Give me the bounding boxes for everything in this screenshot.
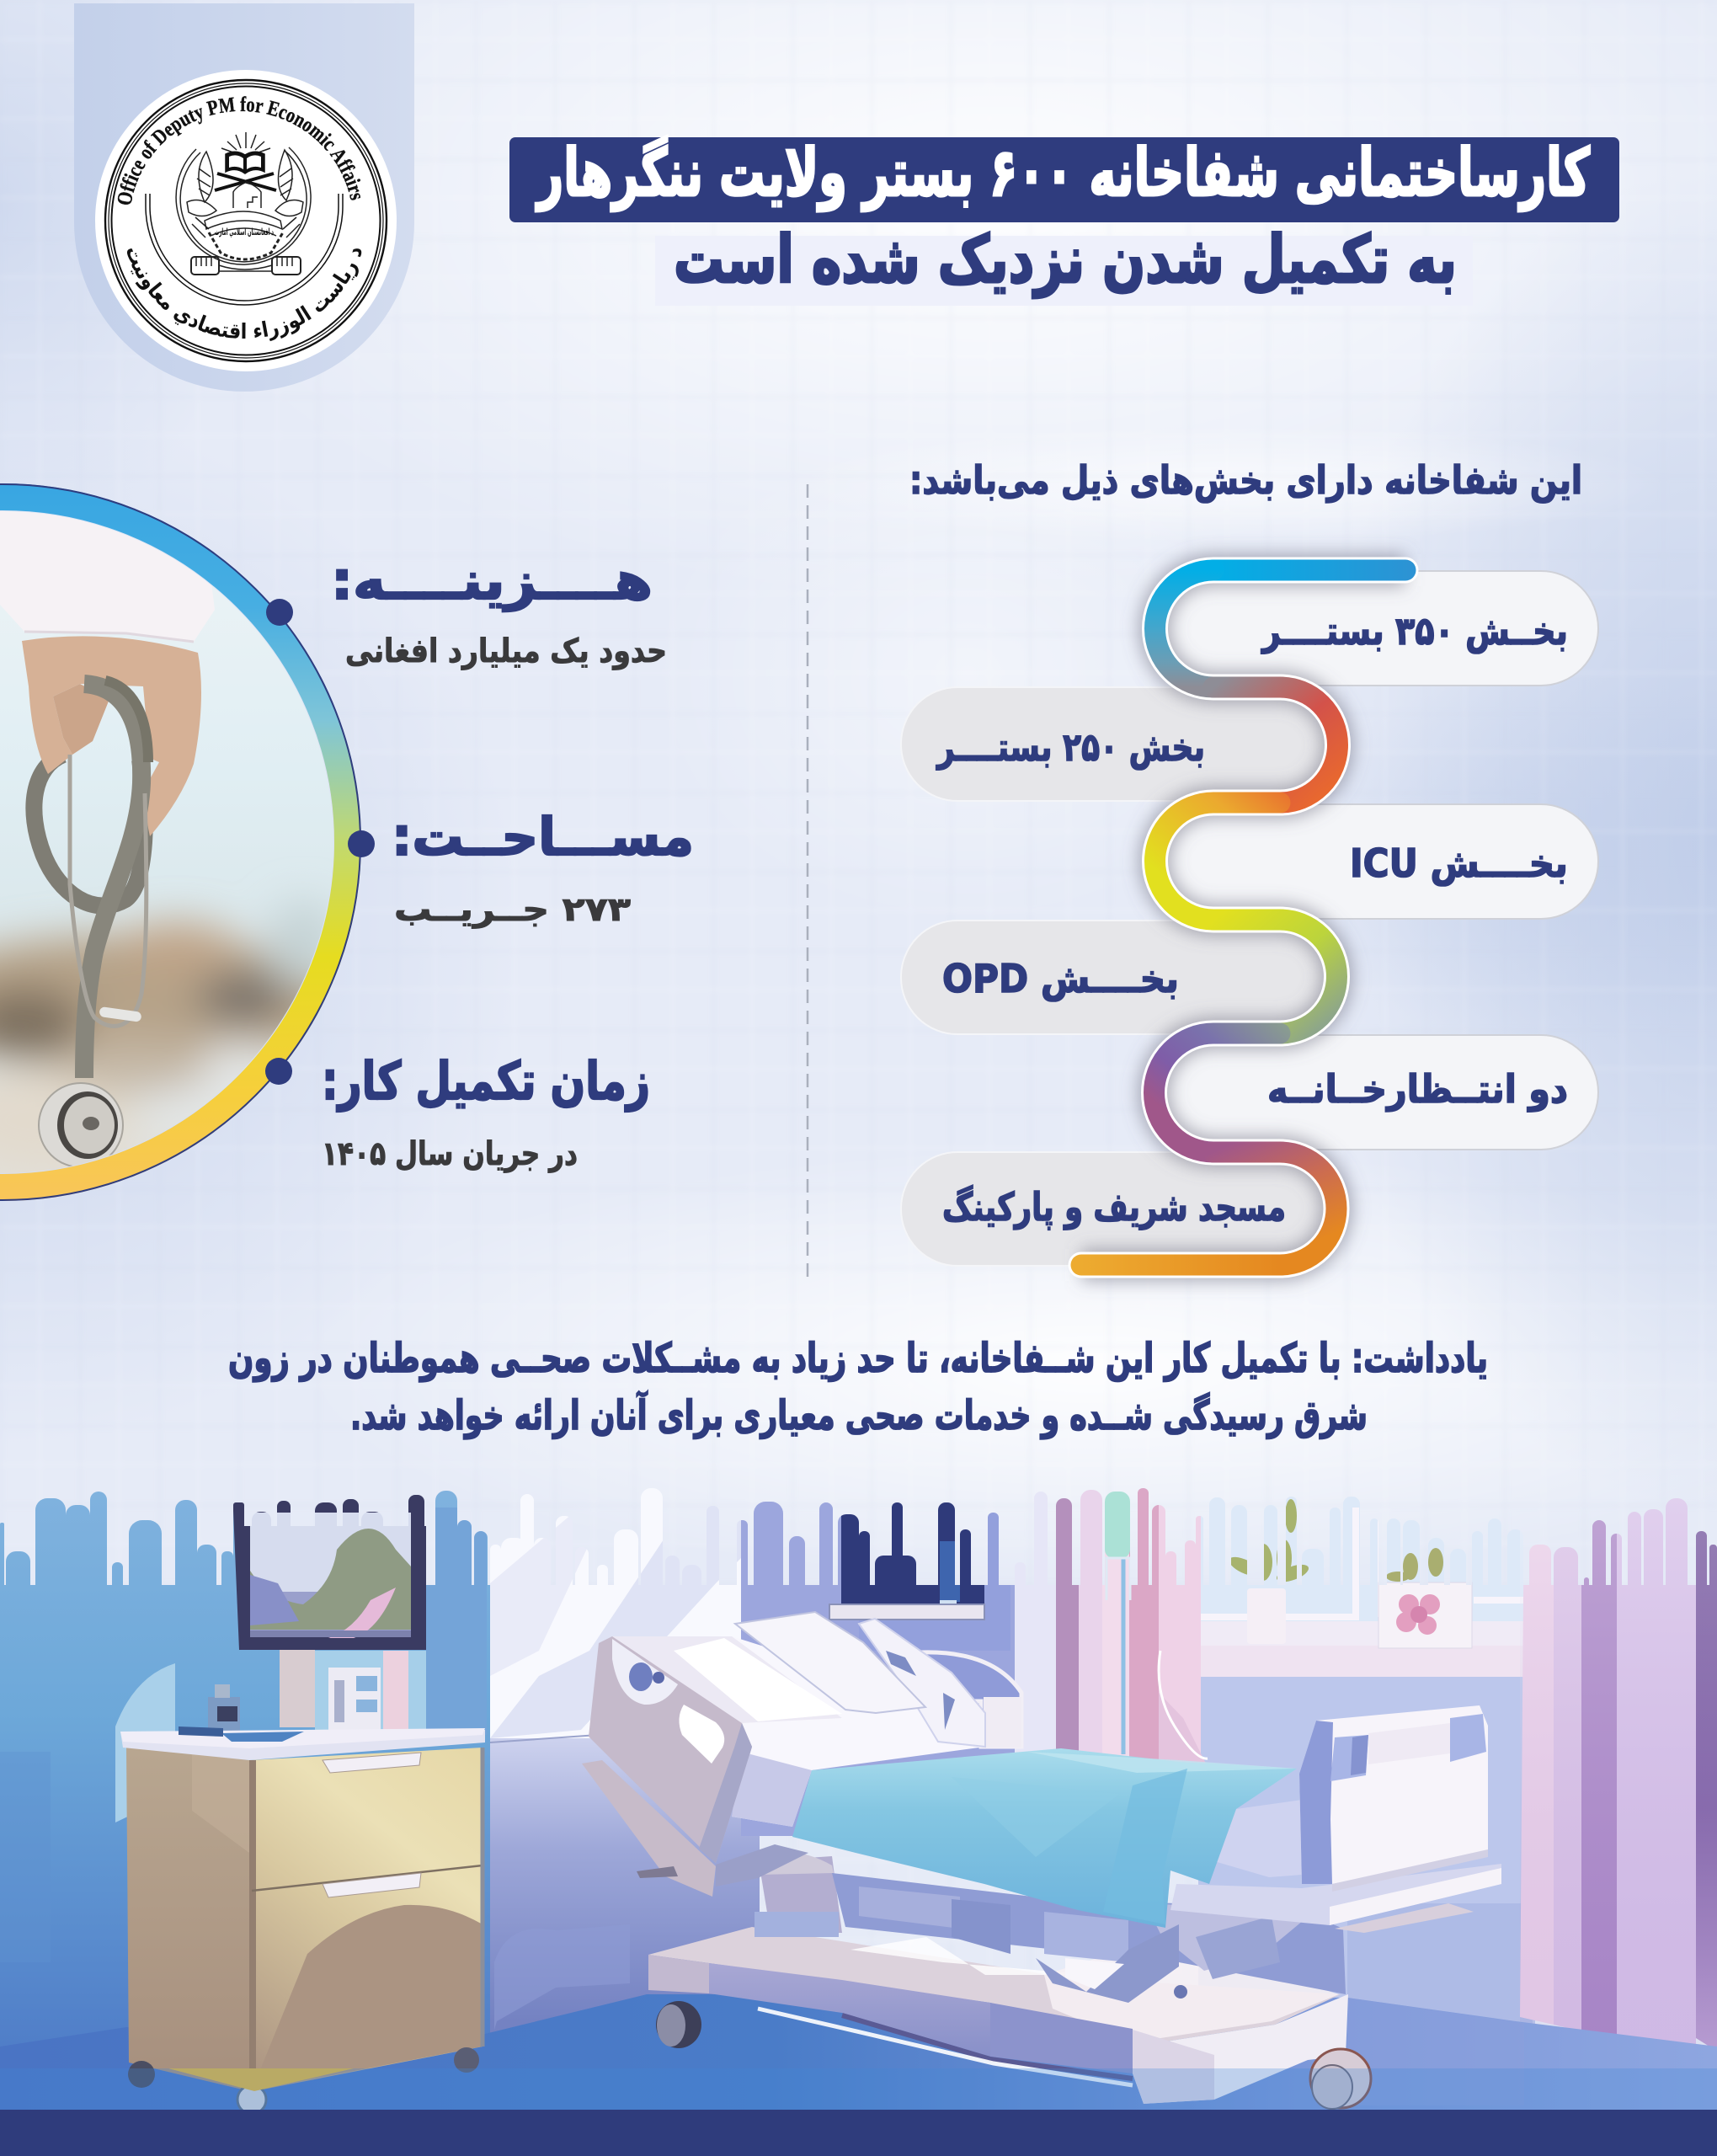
departments winding list [901,570,1598,1266]
value: area: ۲۷۳ جــریــب [394,891,631,929]
value: cost: حدود یک میلیارد افغانی [345,632,667,670]
value: completion: در جریان سال ۱۴۰۵ [322,1135,578,1173]
subtitle text: به تکمیل شدن نزدیک شده است [674,222,1457,298]
ring [0,497,348,1187]
cabinet handles [323,1753,421,1773]
pill 6 [901,1152,1349,1266]
right curtain [1520,1491,1717,2047]
pill 6 text: مسجد شریف و پارکینگ [942,1184,1286,1230]
window and sill [1044,1465,1549,2031]
room walls [0,1488,1015,2047]
icon: stethoscope tube front [84,684,141,1078]
info: completion [322,1050,650,1173]
bed head frame [582,1760,808,1897]
subtitle [655,222,1473,306]
logo seal [95,70,397,371]
photo [0,505,345,1179]
snake shadow [1081,570,1405,1265]
snake outline [1081,570,1405,1265]
bed side monitor and head machine [829,1482,1021,1748]
floor light band [0,2068,1717,2111]
left curtain and IV stand [1015,1482,1208,1769]
title bar [509,136,1619,222]
emblem [176,132,311,275]
note line 2: شرق رسیدگی شــده و خدمات صحی معیاری برای آنان ارائه خواهد شد. [350,1390,1368,1439]
pill 2 [901,687,1349,801]
pill 3 text: بخــــش ICU [1350,841,1568,886]
logo seal: د افغانستان اسلامي امارت [215,227,274,237]
icon: coat sleeve [0,505,215,642]
logo Dari text: د ریاست الوزراء اقتصادي معاونیت [126,248,362,342]
bed foot frame [1170,1864,1501,1925]
pill 3 [1144,804,1598,919]
icon: IV bag [1105,1486,1130,1558]
info: cost [331,550,667,670]
floor [0,1994,1717,2114]
logo English text: Office of Deputy PM for Economic Affairs [118,96,360,205]
bed foot mattress [1214,1800,1302,1877]
bed undercarriage [648,1852,1348,2104]
icon: flower box [1378,1548,1472,1648]
dashed divider [807,484,808,1278]
panel: photo circle with ring [0,484,360,1200]
bed head panel [589,1636,752,1863]
heading: completion: زمان تکمیل کار: [322,1050,650,1112]
bed wheels [656,2001,701,2048]
panel: logo backdrop [74,3,414,392]
footer bar [0,2110,1717,2156]
illustration: hospital room [0,1465,1717,2114]
icon: hand [22,636,201,836]
bed foot board [1299,1705,1488,1892]
heading: cost: هــــزینــــه: [331,550,653,611]
bed column [759,1856,842,1933]
note [228,1335,1488,1439]
monitor stand and devices [208,1650,408,1732]
info: area [392,806,694,929]
bed mattress [612,1636,985,1827]
cabinet [120,1726,485,2114]
pill 4 text: بخــــش OPD [942,956,1179,1001]
pill 5 text: دو انتــظارخــانــه [1267,1066,1568,1112]
pill 1 [1144,571,1598,686]
icon: stethoscope tube back [34,755,145,905]
bed side rail [859,1619,985,1747]
cabinet wheels [128,2061,155,2088]
heading: area: مســـاحــت: [392,806,694,867]
pill 5 [1144,1035,1598,1150]
icon: chest piece [39,1083,123,1167]
departments heading: این شفاخانه دارای بخش‌های ذیل می‌باشد: [909,457,1582,503]
monitor [232,1491,426,1650]
icon: plant pot [1231,1499,1309,1621]
bed blanket [792,1748,1297,1928]
snake coloured path [1081,570,1405,1265]
pill 4 [901,921,1349,1034]
bed pillow [735,1612,925,1713]
marker dots [265,599,375,1085]
pill 1 text: بخــش ۳۵۰ بستــــر [1261,608,1568,654]
pill 2 text: بخش ۲۵۰ بستــــر [936,724,1205,770]
